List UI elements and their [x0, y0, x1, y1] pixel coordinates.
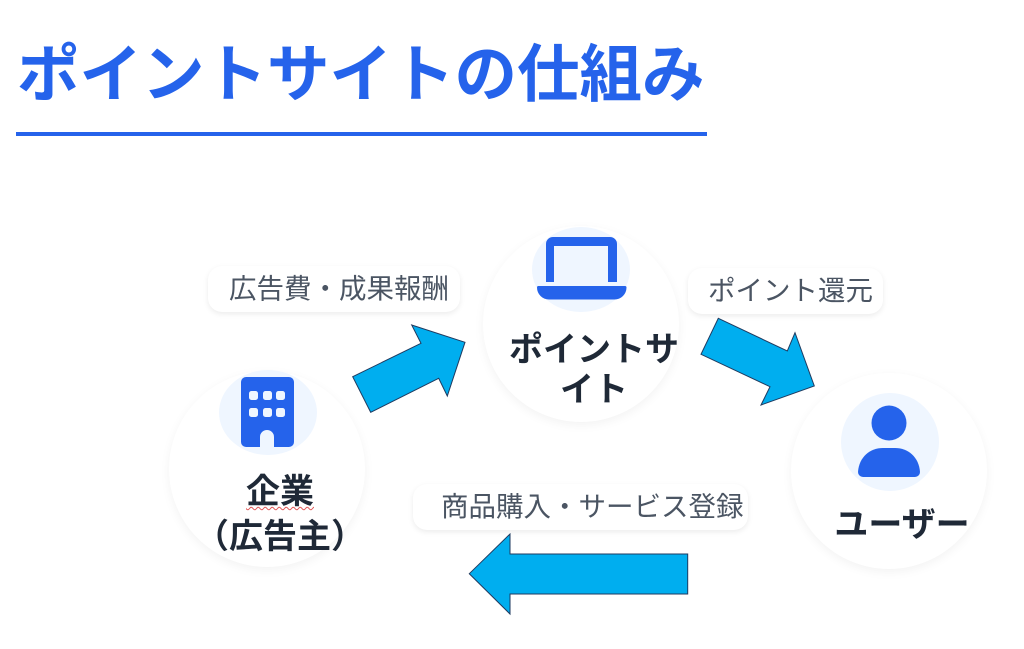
- title: ポイントサイトの仕組み: [17, 40, 704, 110]
- node: point site: [483, 226, 679, 422]
- pill: ad cost: 広告費・成果報酬: [229, 273, 449, 304]
- arrow: site to user: [701, 318, 814, 405]
- label: point site: イト: [560, 371, 628, 409]
- node: user: [791, 373, 987, 569]
- icon: user: [841, 393, 939, 491]
- pill: point reward: ポイント還元: [708, 275, 873, 306]
- arrow: company to site: [353, 325, 465, 412]
- pill: purchase: [413, 484, 748, 530]
- label: user: ユーザー: [834, 506, 970, 544]
- pill: purchase: 商品購入・サービス登録: [441, 491, 744, 522]
- arrow: user to company: [469, 534, 688, 614]
- label: company: 企業: [246, 473, 314, 511]
- node: company: [169, 371, 365, 567]
- label: company: [195, 473, 365, 558]
- icon: laptop: [532, 227, 630, 312]
- label: point site: ポイントサ: [509, 331, 679, 369]
- label: point site: [509, 331, 679, 409]
- pill: point reward: [688, 268, 883, 314]
- pill: ad cost: [208, 266, 460, 312]
- title underline: [16, 132, 707, 136]
- icon: building: [219, 370, 317, 455]
- label: company: （広告主）: [195, 509, 365, 558]
